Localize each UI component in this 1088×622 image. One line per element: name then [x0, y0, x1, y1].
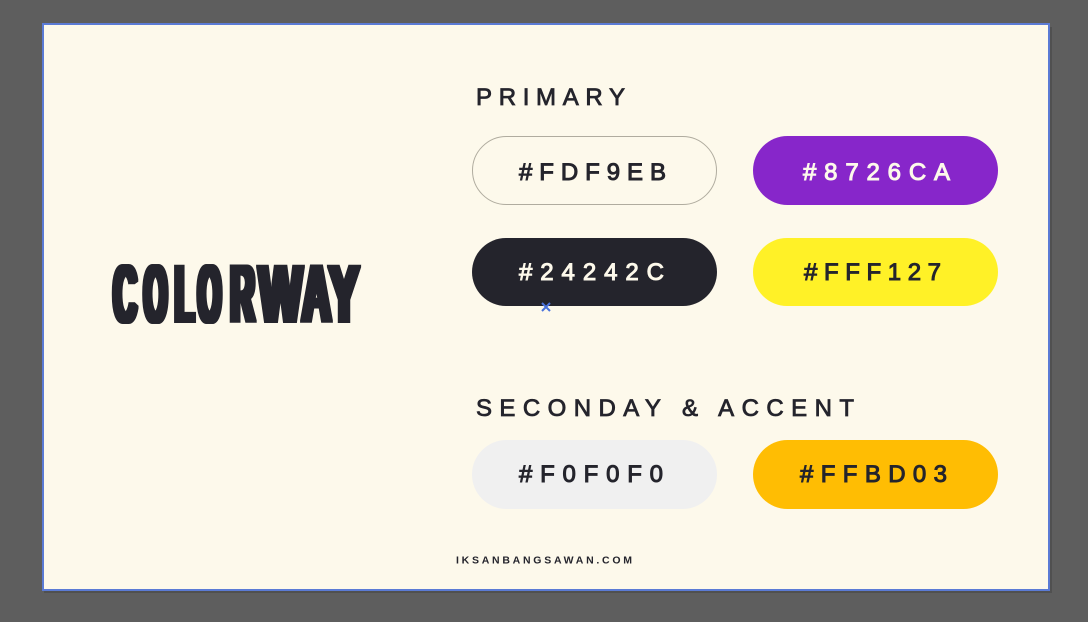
title: COLORWAY: L — [175, 249, 194, 340]
title: COLORWAY: C — [114, 249, 136, 340]
title: COLORWAY: R — [230, 249, 254, 340]
swatch: F0F0F0: #F0F0F0 — [519, 461, 663, 488]
heading: primary: PRIMARY — [476, 84, 625, 111]
swatch: 8726CA — [753, 136, 998, 205]
title: COLORWAY: O — [144, 249, 167, 340]
swatch: 8726CA: #8726CA — [803, 159, 950, 186]
swatch: FDF9EB: #FDF9EB — [519, 159, 666, 186]
swatch: FFBD03 — [753, 440, 998, 509]
title: COLORWAY: O — [198, 249, 221, 340]
swatch: FFF127: #FFF127 — [804, 259, 941, 286]
swatch: FFBD03: #FFBD03 — [800, 461, 947, 488]
footer url: IKSANBANGSAWAN.COM — [456, 554, 632, 566]
title: COLORWAY: W — [259, 249, 302, 340]
selection marker — [542, 303, 550, 311]
heading: secondary and accent: SECONDAY & ACCENT — [476, 395, 854, 422]
swatch: 24242C: #24242C — [519, 259, 664, 286]
swatch: FDF9EB — [472, 136, 716, 204]
swatch: FFF127 — [753, 238, 998, 306]
swatch: 24242C — [472, 238, 717, 306]
title: COLORWAY: A — [302, 249, 331, 340]
swatch: F0F0F0 — [472, 440, 717, 509]
title: COLORWAY: Y — [329, 249, 359, 340]
